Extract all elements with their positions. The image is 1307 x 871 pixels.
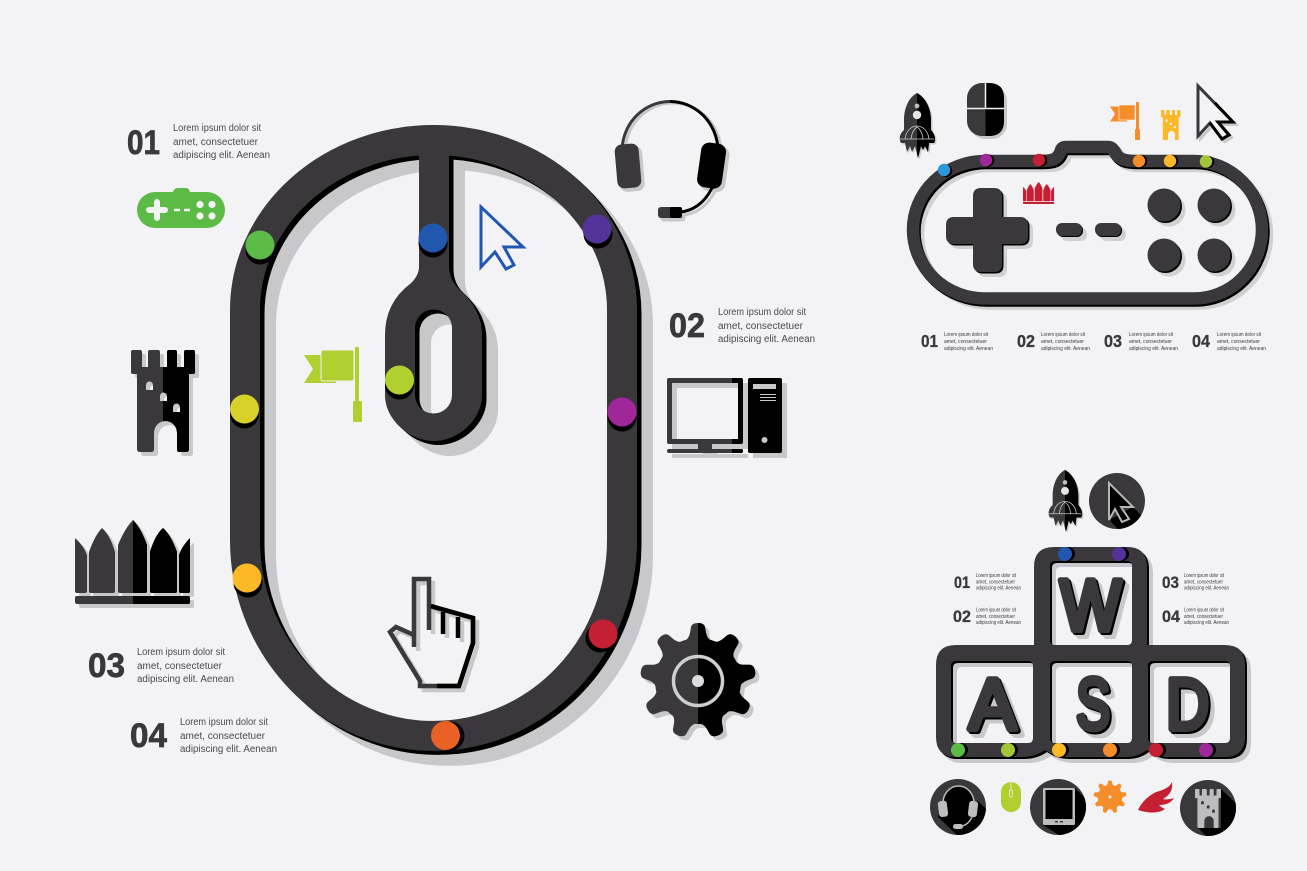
key letters: D bbox=[1166, 665, 1209, 745]
controller labels: 02 bbox=[1017, 331, 1035, 351]
game controller timeline bbox=[913, 147, 1267, 304]
WASD labels: adipiscing elit. Aenean bbox=[976, 620, 1021, 626]
WASD labels: amet, consectetuer bbox=[1184, 580, 1223, 586]
icon: lime flag bbox=[304, 347, 362, 422]
icon: orange gear bbox=[1093, 780, 1127, 814]
WASD labels: Lorem ipsum dolor sit bbox=[976, 608, 1017, 614]
icon: headset in circle bbox=[930, 779, 986, 835]
label 04: adipiscing elit. Aenean bbox=[180, 744, 277, 755]
controller labels: Lorem ipsum dolor sit bbox=[1041, 332, 1086, 338]
WASD labels: Lorem ipsum dolor sit bbox=[976, 573, 1017, 579]
icon: castle tower bbox=[131, 350, 199, 456]
timeline dots on mouse bbox=[230, 214, 636, 750]
label 03: Lorem ipsum dolor sit bbox=[137, 647, 225, 658]
controller labels bbox=[921, 331, 1266, 352]
label 02: amet, consectetuer bbox=[718, 321, 804, 332]
label 04 bbox=[130, 717, 277, 755]
icon: rocket above keys bbox=[1049, 470, 1084, 533]
key letters: S bbox=[1076, 665, 1110, 745]
controller labels: amet, consectetuer bbox=[1217, 339, 1260, 345]
icon: headset bbox=[614, 101, 730, 221]
icon: tablet in circle bbox=[1030, 779, 1086, 835]
WASD labels: adipiscing elit. Aenean bbox=[1184, 586, 1229, 592]
key letters: W bbox=[1060, 566, 1121, 646]
label 01: 01 bbox=[127, 124, 160, 162]
label 03: 03 bbox=[88, 647, 125, 685]
WASD labels: amet, consectetuer bbox=[976, 614, 1015, 620]
label 02: Lorem ipsum dolor sit bbox=[718, 307, 806, 318]
label 03: adipiscing elit. Aenean bbox=[137, 674, 234, 685]
controller labels: amet, consectetuer bbox=[1129, 339, 1172, 345]
label 04: 04 bbox=[130, 717, 167, 755]
controller labels: 04 bbox=[1192, 331, 1210, 351]
select and start buttons bbox=[1056, 223, 1126, 241]
controller labels: Lorem ipsum dolor sit bbox=[1129, 332, 1174, 338]
WASD labels: adipiscing elit. Aenean bbox=[976, 586, 1021, 592]
label 01: Lorem ipsum dolor sit bbox=[173, 123, 261, 134]
icon: lime mouse bbox=[1001, 782, 1021, 812]
controller labels: adipiscing elit. Aenean bbox=[1041, 346, 1090, 352]
icon: desktop computer bbox=[667, 378, 787, 458]
WASD keys timeline bbox=[936, 547, 1251, 763]
controller labels: Lorem ipsum dolor sit bbox=[944, 332, 989, 338]
controller timeline dots bbox=[938, 154, 1214, 177]
label 02: adipiscing elit. Aenean bbox=[718, 334, 815, 345]
controller labels: adipiscing elit. Aenean bbox=[944, 346, 993, 352]
key letters: A bbox=[969, 665, 1016, 745]
label 02 bbox=[669, 307, 815, 345]
label 03 bbox=[88, 647, 234, 685]
icon: amber tower bbox=[1161, 110, 1181, 140]
icon: gear bbox=[639, 623, 761, 744]
controller labels: Lorem ipsum dolor sit bbox=[1217, 332, 1262, 338]
controller labels: adipiscing elit. Aenean bbox=[1129, 346, 1178, 352]
icon: cursor in circle bbox=[1089, 473, 1145, 529]
WASD labels: adipiscing elit. Aenean bbox=[1184, 620, 1229, 626]
icon: computer mouse top bbox=[967, 83, 1007, 139]
icon: black cursor bbox=[1198, 86, 1236, 142]
label 04: amet, consectetuer bbox=[180, 731, 266, 742]
icon: rocket top bbox=[900, 93, 936, 160]
label 01 bbox=[127, 123, 270, 162]
controller labels: amet, consectetuer bbox=[1041, 339, 1084, 345]
icon: tower in circle bbox=[1180, 780, 1236, 836]
icon: green game controller bbox=[137, 188, 225, 228]
icon: pointing hand bbox=[390, 579, 477, 690]
key letters bbox=[969, 566, 1209, 745]
computer mouse timeline bbox=[230, 140, 638, 751]
controller labels: 03 bbox=[1104, 331, 1122, 351]
WASD labels bbox=[953, 573, 1229, 626]
WASD labels: 02 bbox=[953, 607, 971, 626]
key timeline dots bbox=[951, 547, 1216, 757]
controller labels: 01 bbox=[921, 331, 938, 351]
label 04: Lorem ipsum dolor sit bbox=[180, 717, 268, 728]
WASD labels: 04 bbox=[1162, 607, 1181, 626]
WASD labels: 01 bbox=[954, 573, 970, 592]
label 01: adipiscing elit. Aenean bbox=[173, 150, 270, 161]
label 02: 02 bbox=[669, 307, 705, 345]
WASD labels: amet, consectetuer bbox=[1184, 614, 1223, 620]
WASD labels: amet, consectetuer bbox=[976, 580, 1015, 586]
WASD labels: 03 bbox=[1162, 573, 1179, 592]
icon: orange flag bbox=[1110, 102, 1140, 140]
label 01: amet, consectetuer bbox=[173, 137, 259, 148]
WASD labels: Lorem ipsum dolor sit bbox=[1184, 573, 1225, 579]
WASD labels: Lorem ipsum dolor sit bbox=[1184, 608, 1225, 614]
icon: crown bbox=[75, 520, 194, 608]
icon: red crown bbox=[1023, 182, 1054, 204]
action buttons bbox=[1148, 188, 1236, 276]
controller labels: amet, consectetuer bbox=[944, 339, 987, 345]
controller labels: adipiscing elit. Aenean bbox=[1217, 346, 1266, 352]
label 03: amet, consectetuer bbox=[137, 661, 223, 672]
icon: red wing bbox=[1138, 782, 1174, 813]
icon: blue cursor bbox=[481, 207, 523, 269]
d-pad bbox=[946, 188, 1033, 277]
